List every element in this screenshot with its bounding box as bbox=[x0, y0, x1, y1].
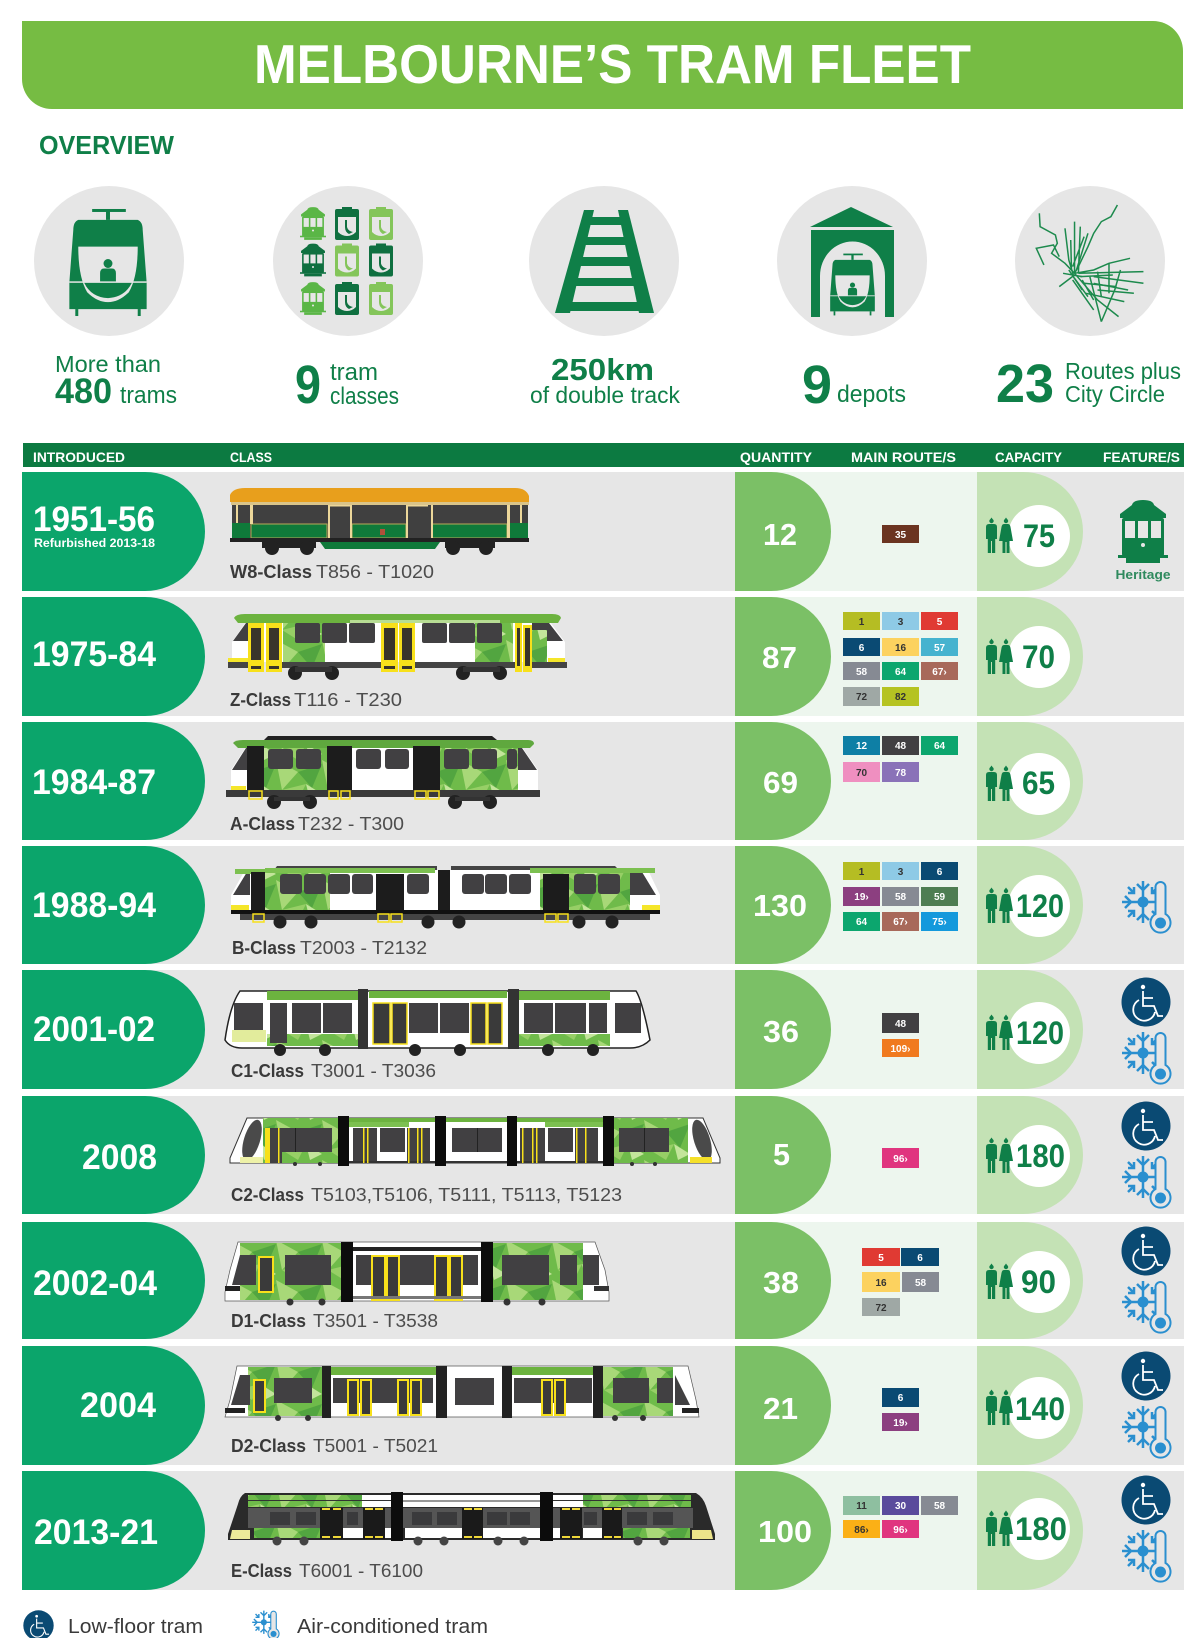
stat: 250km of double track bbox=[529, 186, 680, 408]
class label: D1-Class bbox=[231, 1311, 306, 1331]
feature: air-conditioned bbox=[1122, 881, 1170, 933]
stat: 23 routes plus City Circle: 23 bbox=[996, 354, 1054, 414]
tram illustration: Z bbox=[228, 614, 567, 680]
route badges: 16 bbox=[895, 643, 906, 654]
route badges: 11 bbox=[856, 1501, 867, 1512]
class label bbox=[231, 1436, 438, 1456]
class label: T2003 - T2132 bbox=[300, 938, 427, 958]
route badges: 6 bbox=[917, 1253, 923, 1264]
route badges: 64 bbox=[856, 917, 867, 928]
year badge: 1988-94 bbox=[32, 886, 157, 925]
quantity bbox=[735, 472, 831, 591]
capacity: 140 bbox=[1015, 1391, 1065, 1427]
row: W8-Class bbox=[22, 472, 1184, 591]
row: A-Class bbox=[22, 722, 1184, 840]
year badge: 2004 bbox=[80, 1386, 157, 1425]
year badge bbox=[22, 970, 205, 1089]
route badges: 72 bbox=[856, 692, 867, 703]
feature: heritage: Heritage bbox=[1116, 567, 1170, 582]
route badges: 96› bbox=[893, 1154, 908, 1165]
year badge: 2008 bbox=[82, 1138, 157, 1177]
class label: T5001 - T5021 bbox=[313, 1436, 438, 1456]
quantity: 5 bbox=[773, 1137, 790, 1172]
class label: Z-Class bbox=[230, 690, 291, 710]
tram illustration: E bbox=[228, 1492, 715, 1546]
route badges: 48 bbox=[895, 1019, 906, 1030]
quantity: 12 bbox=[763, 517, 797, 552]
stat: more than 480 trams bbox=[34, 186, 184, 411]
route badges: 70 bbox=[856, 768, 867, 779]
route badges: 72 bbox=[875, 1303, 887, 1314]
route badges bbox=[882, 525, 919, 543]
class label: E-Class bbox=[231, 1561, 292, 1581]
year badge bbox=[22, 597, 205, 716]
year badge bbox=[22, 472, 205, 591]
capacity bbox=[977, 846, 1083, 964]
route badges bbox=[882, 1013, 919, 1057]
route badges bbox=[882, 1148, 919, 1168]
row: E-Class bbox=[22, 1471, 1184, 1590]
quantity: 130 bbox=[753, 888, 807, 923]
year badge: 1975-84 bbox=[32, 635, 157, 674]
route badges bbox=[882, 1388, 919, 1431]
quantity bbox=[735, 1346, 831, 1465]
capacity: 180 bbox=[1016, 1138, 1065, 1174]
tram illustration: B bbox=[231, 866, 660, 928]
class label: W8-Class bbox=[230, 562, 312, 582]
class label: C1-Class bbox=[231, 1061, 304, 1081]
class label: B-Class bbox=[232, 938, 296, 958]
capacity bbox=[977, 722, 1083, 840]
quantity bbox=[735, 722, 831, 840]
year badge: 1984-87 bbox=[32, 763, 156, 802]
row: D2-Class bbox=[22, 1346, 1184, 1465]
capacity bbox=[977, 970, 1083, 1089]
year badge: 2001-02 bbox=[33, 1010, 155, 1049]
class label bbox=[230, 562, 434, 582]
stat: more than 480 trams: 480 bbox=[55, 372, 112, 411]
legend bbox=[23, 1610, 488, 1638]
tram illustration: C2 bbox=[230, 1116, 720, 1166]
route badges bbox=[843, 862, 958, 931]
quantity bbox=[735, 846, 831, 964]
route badges: 3 bbox=[898, 867, 904, 878]
year badge bbox=[22, 1346, 205, 1465]
route badges: 58 bbox=[895, 892, 906, 903]
quantity bbox=[735, 597, 831, 716]
class label bbox=[231, 1561, 423, 1581]
class label bbox=[230, 814, 404, 834]
feature: low-floor and air-conditioned bbox=[1122, 1226, 1170, 1333]
stat: 9 depots bbox=[777, 186, 927, 415]
quantity: 38 bbox=[763, 1265, 799, 1300]
legend: Air-conditioned tram bbox=[297, 1616, 488, 1638]
capacity: 120 bbox=[1016, 888, 1064, 924]
route badges: 59 bbox=[934, 892, 945, 903]
stat: 9 depots: depots bbox=[837, 381, 906, 408]
table header bar: CLASS bbox=[230, 449, 272, 465]
capacity bbox=[977, 1222, 1083, 1339]
capacity bbox=[977, 597, 1083, 716]
capacity: 90 bbox=[1021, 1264, 1056, 1300]
stat: 9 tram classes: classes bbox=[330, 383, 399, 410]
route badges: 19› bbox=[893, 1418, 908, 1429]
table header bar: FEATURE/S bbox=[1103, 449, 1180, 465]
stat: 250km of double track: of double track bbox=[530, 382, 680, 408]
stat: more than 480 trams: More than bbox=[55, 351, 161, 377]
route badges: 58 bbox=[915, 1278, 926, 1289]
class label: D2-Class bbox=[231, 1436, 306, 1456]
quantity: 100 bbox=[758, 1514, 812, 1549]
class label: A-Class bbox=[230, 814, 295, 834]
route badges: 1 bbox=[859, 867, 865, 878]
year badge bbox=[22, 1471, 205, 1590]
stat: 9 tram classes: 9 bbox=[295, 355, 321, 415]
route badges: 5 bbox=[878, 1253, 884, 1264]
row: D1-Class bbox=[22, 1222, 1184, 1339]
route badges: 5 bbox=[937, 617, 943, 628]
class label: T856 - T1020 bbox=[316, 562, 434, 582]
table header bar bbox=[23, 443, 1184, 467]
tram illustration: D2 bbox=[225, 1366, 699, 1421]
row: C2-Class bbox=[22, 1096, 1184, 1214]
heading: overview: OVERVIEW bbox=[39, 130, 174, 160]
capacity bbox=[977, 1471, 1083, 1590]
feature: low-floor and air-conditioned bbox=[1122, 1102, 1170, 1208]
tram illustration: D1 bbox=[225, 1242, 609, 1306]
table header bar: QUANTITY bbox=[740, 449, 813, 465]
quantity bbox=[735, 1222, 831, 1339]
quantity bbox=[735, 1096, 831, 1214]
year badge bbox=[22, 1096, 205, 1214]
year badge: 2002-04 bbox=[33, 1264, 158, 1303]
stat: 9 tram classes bbox=[273, 186, 423, 415]
quantity: 36 bbox=[763, 1014, 799, 1049]
legend icon: air-conditioned bbox=[252, 1611, 279, 1638]
title banner bbox=[22, 21, 1183, 109]
table header bar: INTRODUCED bbox=[33, 449, 125, 465]
route badges: 64 bbox=[895, 667, 906, 678]
route badges: 19› bbox=[854, 892, 869, 903]
route badges: 75› bbox=[932, 917, 947, 928]
route badges: 12 bbox=[856, 741, 867, 752]
class label bbox=[231, 1311, 438, 1331]
route badges: 86› bbox=[854, 1525, 869, 1536]
route badges: 6 bbox=[937, 867, 943, 878]
year badge bbox=[22, 846, 205, 964]
class label: C2-Class bbox=[231, 1185, 304, 1205]
feature: low-floor and air-conditioned bbox=[1122, 1352, 1170, 1458]
capacity bbox=[977, 1096, 1083, 1214]
stat: 23 routes plus City Circle: City Circle bbox=[1065, 381, 1165, 407]
row: Z-Class bbox=[22, 597, 1184, 716]
route badges: 35 bbox=[895, 530, 906, 541]
capacity: 70 bbox=[1022, 639, 1055, 675]
route badges bbox=[862, 1248, 939, 1316]
title banner: MELBOURNE’S TRAM FLEET bbox=[254, 33, 971, 95]
capacity: 75 bbox=[1023, 518, 1055, 554]
route badges: 78 bbox=[895, 768, 906, 779]
route badges: 6 bbox=[898, 1393, 904, 1404]
route badges bbox=[843, 1496, 958, 1538]
class label bbox=[230, 690, 402, 710]
year badge: 1951-56 bbox=[33, 500, 155, 539]
table header bar: CAPACITY bbox=[995, 449, 1063, 465]
quantity: 21 bbox=[763, 1391, 798, 1426]
quantity bbox=[735, 1471, 831, 1590]
row: C1-Class bbox=[22, 970, 1184, 1089]
route badges: 109› bbox=[890, 1044, 911, 1055]
class label: T232 - T300 bbox=[298, 814, 404, 834]
route badges bbox=[843, 736, 958, 782]
tram illustration: W8 bbox=[230, 488, 529, 555]
route badges: 58 bbox=[856, 667, 867, 678]
capacity: 65 bbox=[1022, 765, 1055, 801]
class label: T116 - T230 bbox=[294, 690, 402, 710]
capacity: 180 bbox=[1015, 1511, 1067, 1547]
class label: T3001 - T3036 bbox=[311, 1061, 436, 1081]
route badges: 16 bbox=[875, 1278, 887, 1289]
class label: T3501 - T3538 bbox=[313, 1311, 438, 1331]
year badge: 2013-21 bbox=[34, 1513, 158, 1552]
tram illustration: A bbox=[226, 736, 540, 809]
route badges: 82 bbox=[895, 692, 906, 703]
year badge bbox=[22, 722, 205, 840]
route badges: 3 bbox=[898, 617, 904, 628]
route badges: 58 bbox=[934, 1501, 945, 1512]
class label: T6001 - T6100 bbox=[299, 1561, 423, 1581]
capacity bbox=[977, 1346, 1083, 1465]
row: B-Class bbox=[22, 846, 1184, 964]
tram illustration: C1 bbox=[225, 989, 650, 1056]
class label bbox=[231, 1061, 436, 1081]
stat: 9 tram classes: tram bbox=[330, 359, 378, 386]
route badges bbox=[843, 612, 958, 706]
stat: 9 depots: 9 bbox=[802, 355, 832, 415]
route badges: 1 bbox=[859, 617, 865, 628]
route badges: 67› bbox=[932, 667, 947, 678]
route badges: 6 bbox=[859, 643, 865, 654]
route badges: 96› bbox=[893, 1525, 908, 1536]
route badges: 30 bbox=[895, 1501, 906, 1512]
stat: 23 routes plus City Circle: Routes plus bbox=[1065, 358, 1181, 384]
quantity: 69 bbox=[763, 765, 798, 800]
class label: T5103,T5106, T5111, T5113, T5123 bbox=[311, 1185, 622, 1205]
legend: Low-floor tram bbox=[68, 1616, 203, 1638]
table header bar: MAIN ROUTE/S bbox=[851, 449, 956, 465]
class label bbox=[232, 938, 427, 958]
capacity: 120 bbox=[1016, 1015, 1064, 1051]
feature: heritage bbox=[1116, 500, 1170, 582]
year badge: Refurbished 2013-18 bbox=[34, 536, 155, 550]
route badges: 67› bbox=[893, 917, 908, 928]
route badges: 57 bbox=[934, 643, 945, 654]
feature: low-floor and air-conditioned bbox=[1122, 978, 1170, 1084]
legend icon: low-floor bbox=[23, 1610, 54, 1638]
capacity bbox=[977, 472, 1083, 591]
quantity bbox=[735, 970, 831, 1089]
stat: 250km of double track: 250km bbox=[551, 352, 654, 387]
feature: low-floor and air-conditioned bbox=[1122, 1476, 1170, 1582]
route badges: 64 bbox=[934, 741, 945, 752]
route badges: 48 bbox=[895, 741, 906, 752]
year badge bbox=[22, 1222, 205, 1339]
quantity: 87 bbox=[762, 640, 797, 675]
stat: more than 480 trams: trams bbox=[120, 382, 177, 409]
stat: 23 routes plus City Circle bbox=[996, 186, 1181, 414]
